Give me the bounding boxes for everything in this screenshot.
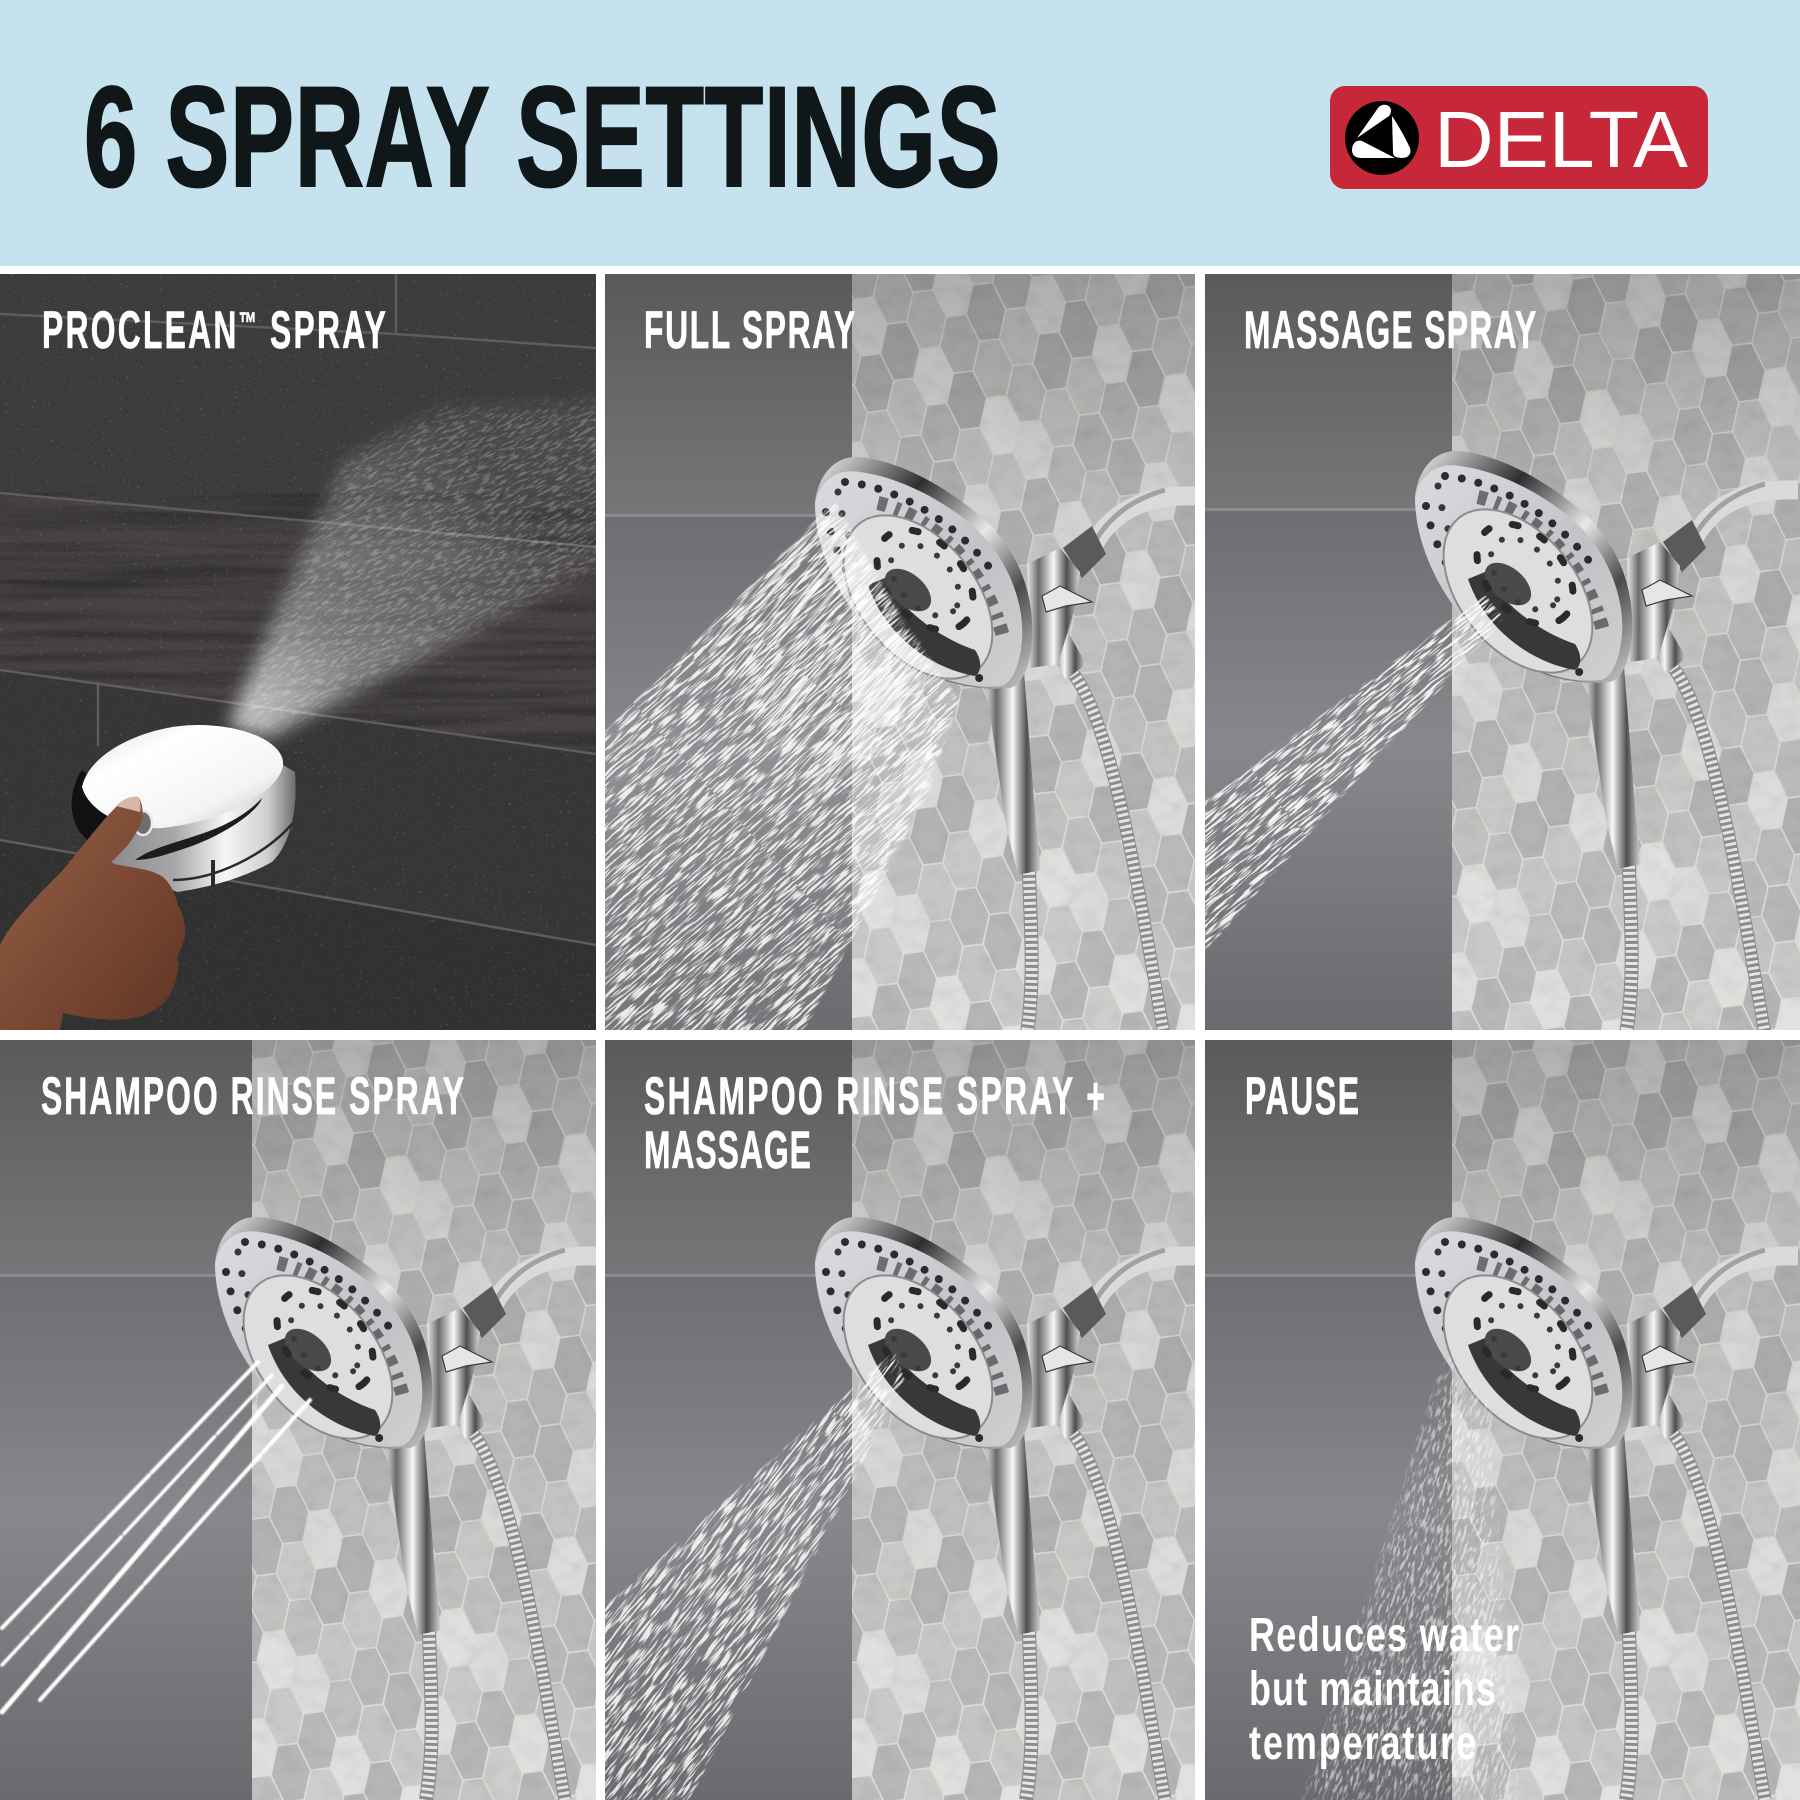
panel: Full spray xyxy=(600,274,1200,1040)
panel: ProClean spray xyxy=(0,274,596,1030)
text block: pause note: but maintains xyxy=(1249,1662,1496,1715)
text block: pause note: temperature xyxy=(1249,1716,1476,1769)
panel: Shampoo rinse spray plus massage xyxy=(600,1034,1200,1800)
panel: Shampoo rinse spray xyxy=(0,1034,600,1800)
water jet xyxy=(219,394,596,746)
logo: Delta xyxy=(1330,86,1708,189)
water: massage spray xyxy=(1200,594,1505,959)
hand xyxy=(0,797,185,1030)
label: Massage spray: MASSAGE SPRAY xyxy=(1244,301,1536,360)
hand-held shower head xyxy=(72,725,296,892)
label: ProClean: SPRAY xyxy=(259,301,386,360)
label: Shampoo rinse spray: SHAMPOO RINSE SPRAY xyxy=(41,1067,464,1126)
text block: pause note xyxy=(1249,1608,1519,1769)
label: Shampoo rinse spray plus massage: MASSAGE xyxy=(644,1121,811,1180)
title: 6 SPRAY SETTINGS xyxy=(84,57,1001,217)
label: Shampoo rinse spray plus massage xyxy=(644,1067,1105,1180)
water: shampoo rinse streams xyxy=(2,1362,310,1712)
label: ProClean: PROCLEAN xyxy=(42,301,236,360)
logo: Delta: DELTA xyxy=(1434,95,1689,184)
label: Full spray: FULL SPRAY xyxy=(644,301,855,360)
label: Pause: PAUSE xyxy=(1245,1067,1359,1126)
label: ProClean: ™ xyxy=(239,308,257,340)
panel: Massage spray xyxy=(1200,268,1800,1034)
panel: Pause xyxy=(1200,1034,1800,1800)
water: pause trickle xyxy=(1300,1350,1520,1800)
water: shampoo rinse plus massage xyxy=(600,1350,905,1800)
water: full spray xyxy=(600,500,960,1040)
label: Shampoo rinse spray plus massage: SHAMPOO RINSE SPRAY + xyxy=(644,1067,1105,1126)
text block: pause note: Reduces water xyxy=(1249,1608,1519,1661)
header band xyxy=(0,0,1800,266)
